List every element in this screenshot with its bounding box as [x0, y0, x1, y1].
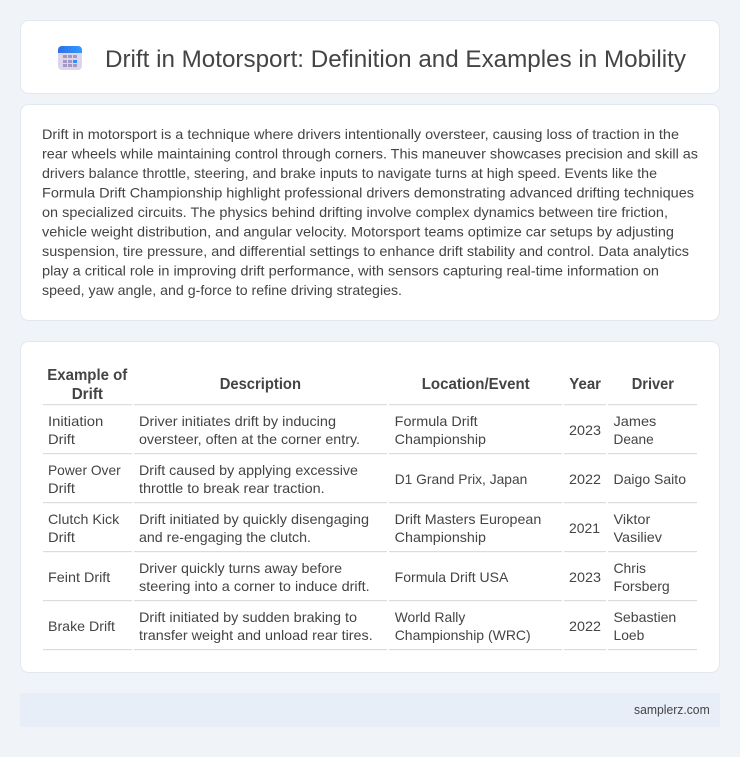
- table header row: Drift: [72, 386, 104, 403]
- footer: [20, 693, 720, 727]
- table row: Power Over Drift: 2022: [569, 471, 601, 487]
- table row: Clutch Kick Drift: [48, 511, 662, 545]
- table row: Power Over Drift: throttle to break rear traction.: [139, 480, 325, 496]
- table row: Power Over Drift: Daigo Saito: [614, 471, 686, 487]
- table header row: Driver: [632, 376, 674, 393]
- panel: examples table: [20, 342, 720, 672]
- text block: paragraph: speed, yaw angle, and g-force to refine driving strategies.: [42, 282, 402, 298]
- table row: Brake Drift: Sebastien: [614, 609, 676, 625]
- table row: Clutch Kick Drift: Clutch Kick: [48, 511, 120, 527]
- table row: Clutch Kick Drift: Drift Masters European: [395, 511, 541, 527]
- table row: Initiation Drift: oversteer, often at the corner entry.: [139, 431, 360, 447]
- table row: Initiation Drift: Initiation: [48, 413, 103, 429]
- table header row: [47, 367, 674, 403]
- table row: Feint Drift: Driver quickly turns away before: [139, 560, 342, 576]
- table row: Feint Drift: 2023: [569, 569, 601, 585]
- table row: Initiation Drift: 2023: [569, 422, 601, 438]
- text block: paragraph: [42, 126, 698, 298]
- title: Drift in Motorsport: Definition and Examples in Mobility: [105, 46, 686, 73]
- table row: Initiation Drift: Driver initiates drift by inducing: [139, 413, 336, 429]
- text block: paragraph: vehicle weight distribution, and angular velocity. Motorsport teams optimize car setups by adjusting: [42, 224, 674, 240]
- table row: Brake Drift: World Rally: [395, 609, 465, 625]
- table row: Feint Drift: [48, 560, 670, 594]
- panel: intro paragraph: [20, 104, 720, 320]
- text block: paragraph: suspension, tire pressure, and differential settings to enhance drift stability and control. Data analytics: [42, 243, 689, 259]
- table header row: Location/Event: [422, 376, 530, 393]
- table row: Power Over Drift: D1 Grand Prix, Japan: [395, 471, 527, 487]
- table row: Clutch Kick Drift: Viktor: [614, 511, 651, 527]
- table row: Power Over Drift: Drift caused by applying excessive: [139, 462, 358, 478]
- panel: title header: [20, 20, 720, 94]
- table row: Feint Drift: Feint Drift: [48, 569, 110, 585]
- table row: Brake Drift: 2022: [569, 618, 601, 634]
- table header row: Year: [569, 376, 601, 393]
- table row: Brake Drift: Brake Drift: [48, 618, 115, 634]
- table row: Initiation Drift: Formula Drift: [395, 413, 478, 429]
- table row: Clutch Kick Drift: Drift: [48, 529, 75, 545]
- table row: Initiation Drift: Deane: [614, 431, 654, 447]
- text block: paragraph: rear wheels while maintaining control through corners. This maneuver showcases precision and skill as: [42, 146, 698, 162]
- table row: Brake Drift: Loeb: [614, 627, 644, 643]
- text block: paragraph: Formula Drift Championship highlight professional drivers demonstrating advanced drifting techniques: [42, 184, 694, 200]
- table row: Clutch Kick Drift: Championship: [395, 529, 486, 545]
- table row: Power Over Drift: Drift: [48, 480, 75, 496]
- table row: Clutch Kick Drift: Vasiliev: [614, 529, 662, 545]
- table row: Clutch Kick Drift: Drift initiated by quickly disengaging: [139, 511, 369, 527]
- table row: Brake Drift: Championship (WRC): [395, 627, 531, 643]
- table row: Initiation Drift: Drift: [48, 431, 75, 447]
- footer: samplerz.com: [634, 703, 710, 717]
- table row: Brake Drift: Drift initiated by sudden braking to: [139, 609, 357, 625]
- table row: Feint Drift: Chris: [614, 560, 646, 576]
- text block: paragraph: play a critical role in improving drift performance, with sensors capturing real-time information on: [42, 262, 659, 278]
- table row: Initiation Drift: Championship: [395, 431, 486, 447]
- table row: Feint Drift: Forsberg: [614, 578, 670, 594]
- icon: calendar: [58, 46, 82, 70]
- text block: paragraph: on specialized circuits. The physics behind drifting involve complex dynamics between tire friction,: [42, 204, 668, 220]
- text block: paragraph: Drift in motorsport is a technique where drivers intentionally oversteer, causing loss of traction in the: [42, 126, 679, 142]
- table row: Clutch Kick Drift: 2021: [569, 520, 600, 536]
- table row: Brake Drift: [48, 609, 676, 643]
- table header row: Example of: [47, 367, 128, 384]
- table header row: Description: [220, 376, 301, 393]
- table row: Initiation Drift: James: [614, 413, 656, 429]
- text block: paragraph: drivers balance throttle, steering, and brake inputs to navigate turns at high speed. Events like the: [42, 165, 657, 181]
- table row: Power Over Drift: [48, 462, 686, 496]
- table row: Clutch Kick Drift: and re-engaging the clutch.: [139, 529, 311, 545]
- table row: Power Over Drift: Power Over: [48, 462, 121, 478]
- table row: Brake Drift: transfer weight and unload rear tires.: [139, 627, 373, 643]
- table row: Initiation Drift: [48, 413, 656, 447]
- table row: Feint Drift: Formula Drift USA: [395, 569, 509, 585]
- table row: Feint Drift: steering into a corner to induce drift.: [139, 578, 370, 594]
